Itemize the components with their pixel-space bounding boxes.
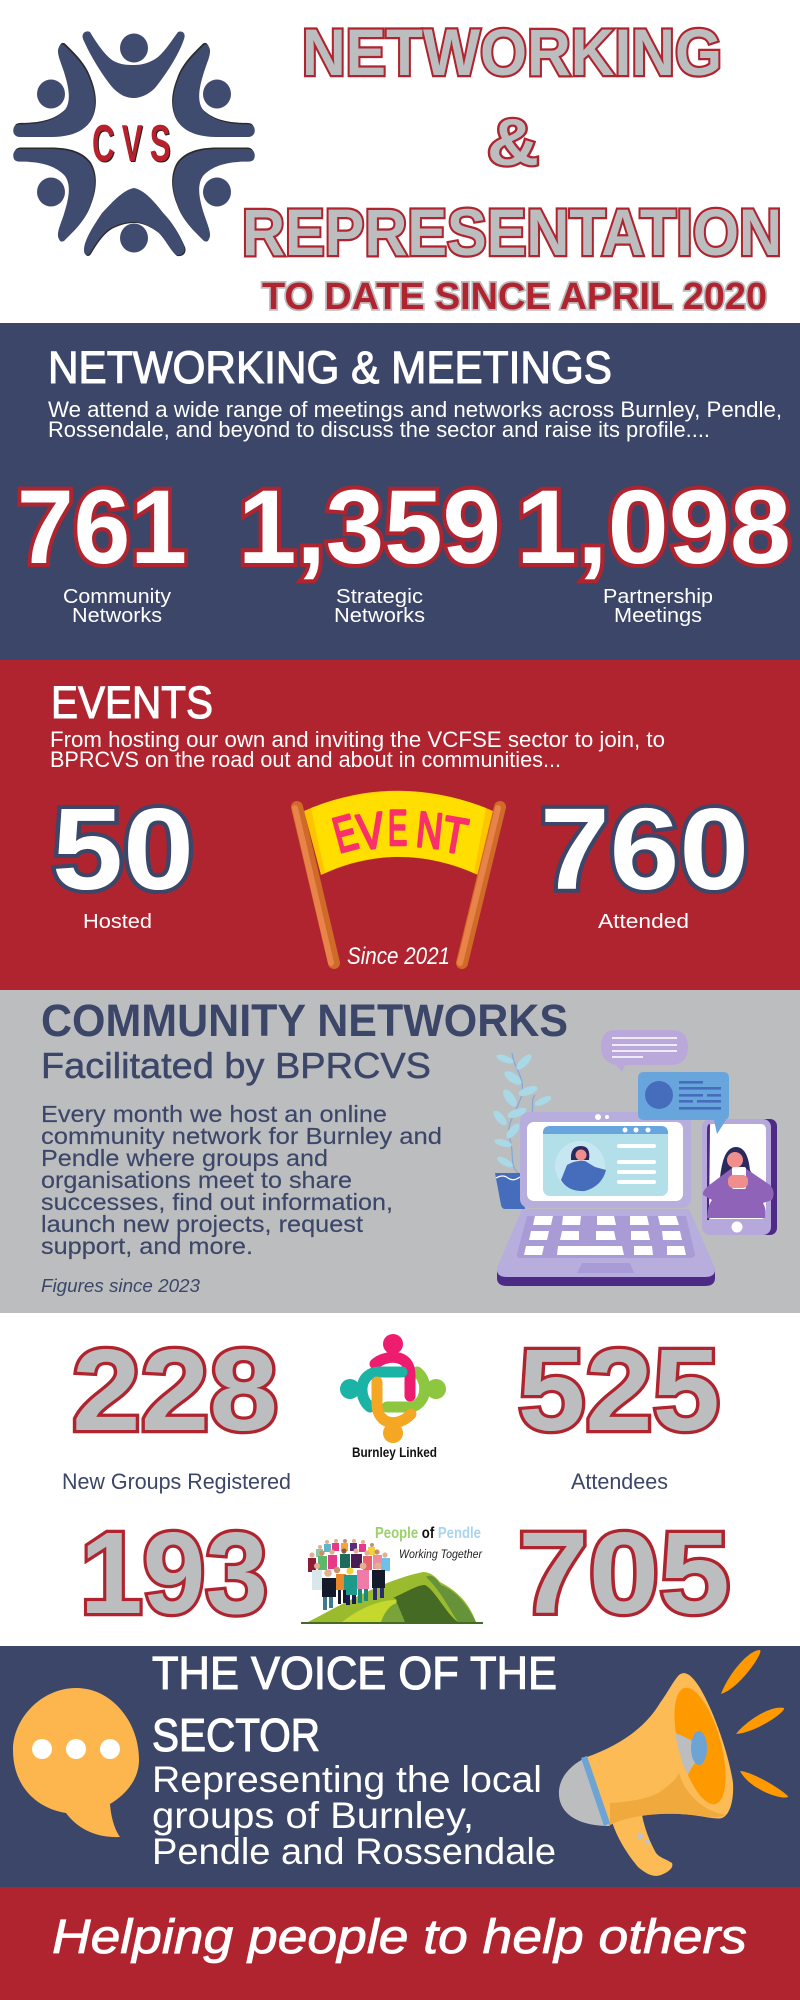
title: &	[487, 105, 539, 179]
icon: CVS logo: CVS	[93, 116, 179, 174]
text block	[48, 397, 782, 442]
text block: launch new projects, request	[41, 1211, 363, 1237]
text block: successes, find out information,	[41, 1189, 393, 1215]
icon: CVS logo	[13, 31, 255, 256]
icon: event flag	[295, 791, 500, 970]
text block: BPRCVS on the road out and about in communities...	[50, 747, 561, 772]
panel: group figures	[0, 1313, 800, 1646]
icon: event flag: N	[414, 803, 445, 860]
icon: event flag: T	[438, 805, 472, 865]
icon: purple speech bubble	[601, 1030, 688, 1072]
label: new groups registered: New Groups Registered	[62, 1469, 291, 1494]
icon: plant	[491, 1052, 553, 1209]
tagline: Helping people to help others	[52, 1911, 747, 1964]
stat: community networks: 761	[17, 469, 187, 586]
text block: community network for Burnley and	[41, 1123, 442, 1149]
stat: partnership meetings: 1,098	[516, 469, 791, 586]
icon: People of Pendle logo: Working Together	[399, 1547, 483, 1561]
text block: We attend a wide range of meetings and networks across Burnley, Pendle,	[48, 397, 782, 422]
icon: blue speech bubble	[638, 1072, 729, 1134]
panel: footer tagline	[0, 1887, 800, 2000]
stat: 193: 193	[80, 1508, 268, 1638]
icon: event flag: E	[388, 800, 407, 856]
text block: Pendle where groups and	[41, 1145, 328, 1171]
title	[242, 15, 782, 269]
text block: Every month we host an online	[41, 1101, 387, 1127]
text block: groups of Burnley,	[152, 1795, 474, 1836]
icon: Burnley Linked logo	[340, 1334, 446, 1460]
stat: hosted: 50	[52, 784, 194, 914]
panel: voice of the sector	[0, 1646, 800, 1887]
heading: THE VOICE OF THE	[152, 1647, 557, 1699]
text block: support, and more.	[41, 1233, 253, 1259]
stat: 228 new groups: 228	[72, 1325, 278, 1455]
label: attendees: Attendees	[571, 1469, 668, 1494]
icon: event flag: Since 2021	[347, 943, 450, 970]
text block: organisations meet to share	[41, 1167, 352, 1193]
icon: event flag: V	[354, 801, 388, 861]
text block	[152, 1759, 556, 1872]
stat: strategic networks: 1,359	[238, 469, 501, 586]
icon: People of Pendle logo: People of Pendle	[375, 1525, 481, 1542]
heading: COMMUNITY NETWORKS	[41, 995, 568, 1046]
icon: speech bubble	[13, 1688, 139, 1837]
icon: event flag: E	[327, 804, 363, 863]
stat: community networks: Community	[63, 586, 171, 608]
subtitle: TO DATE SINCE APRIL 2020	[262, 276, 767, 318]
icon: CVS logo: CVS	[92, 115, 178, 173]
stat: 525 attendees: 525	[518, 1325, 720, 1455]
text block: Representing the local	[152, 1759, 542, 1800]
panel: events	[0, 660, 800, 990]
panel: header	[0, 0, 800, 323]
stat: hosted: Hosted	[83, 911, 152, 933]
stat: attended: Attended	[598, 911, 689, 933]
stat: 705: 705	[518, 1508, 730, 1638]
stat: community networks: Networks	[72, 605, 162, 627]
stat: strategic networks: Strategic	[336, 586, 423, 608]
heading: EVENTS	[51, 677, 213, 728]
heading: NETWORKING & MEETINGS	[48, 342, 612, 393]
text block	[50, 727, 665, 772]
subheading: Facilitated by BPRCVS	[41, 1045, 431, 1086]
icon: laptop	[497, 1112, 715, 1286]
title: NETWORKING	[302, 15, 722, 89]
stat: strategic networks: Networks	[334, 605, 425, 627]
icon: People of Pendle logo	[301, 1525, 483, 1624]
panel: community networks	[0, 990, 800, 1313]
text block: Rossendale, and beyond to discuss the sector and raise its profile....	[48, 417, 710, 442]
icon: Burnley Linked logo: Burnley Linked	[352, 1444, 437, 1460]
text block	[41, 1101, 442, 1259]
note: Figures since 2023	[41, 1276, 200, 1296]
stat: attended: 760	[540, 784, 749, 914]
icon: megaphone	[559, 1650, 788, 1876]
heading: SECTOR	[152, 1709, 320, 1761]
heading	[152, 1647, 557, 1761]
text block: From hosting our own and inviting the VCFSE sector to join, to	[50, 727, 665, 752]
stat: partnership meetings: Partnership	[603, 586, 713, 608]
panel: networking and meetings	[0, 323, 800, 660]
stat: partnership meetings: Meetings	[614, 605, 702, 627]
text block: Pendle and Rossendale	[152, 1831, 556, 1872]
icon: phone with person	[702, 1119, 777, 1235]
